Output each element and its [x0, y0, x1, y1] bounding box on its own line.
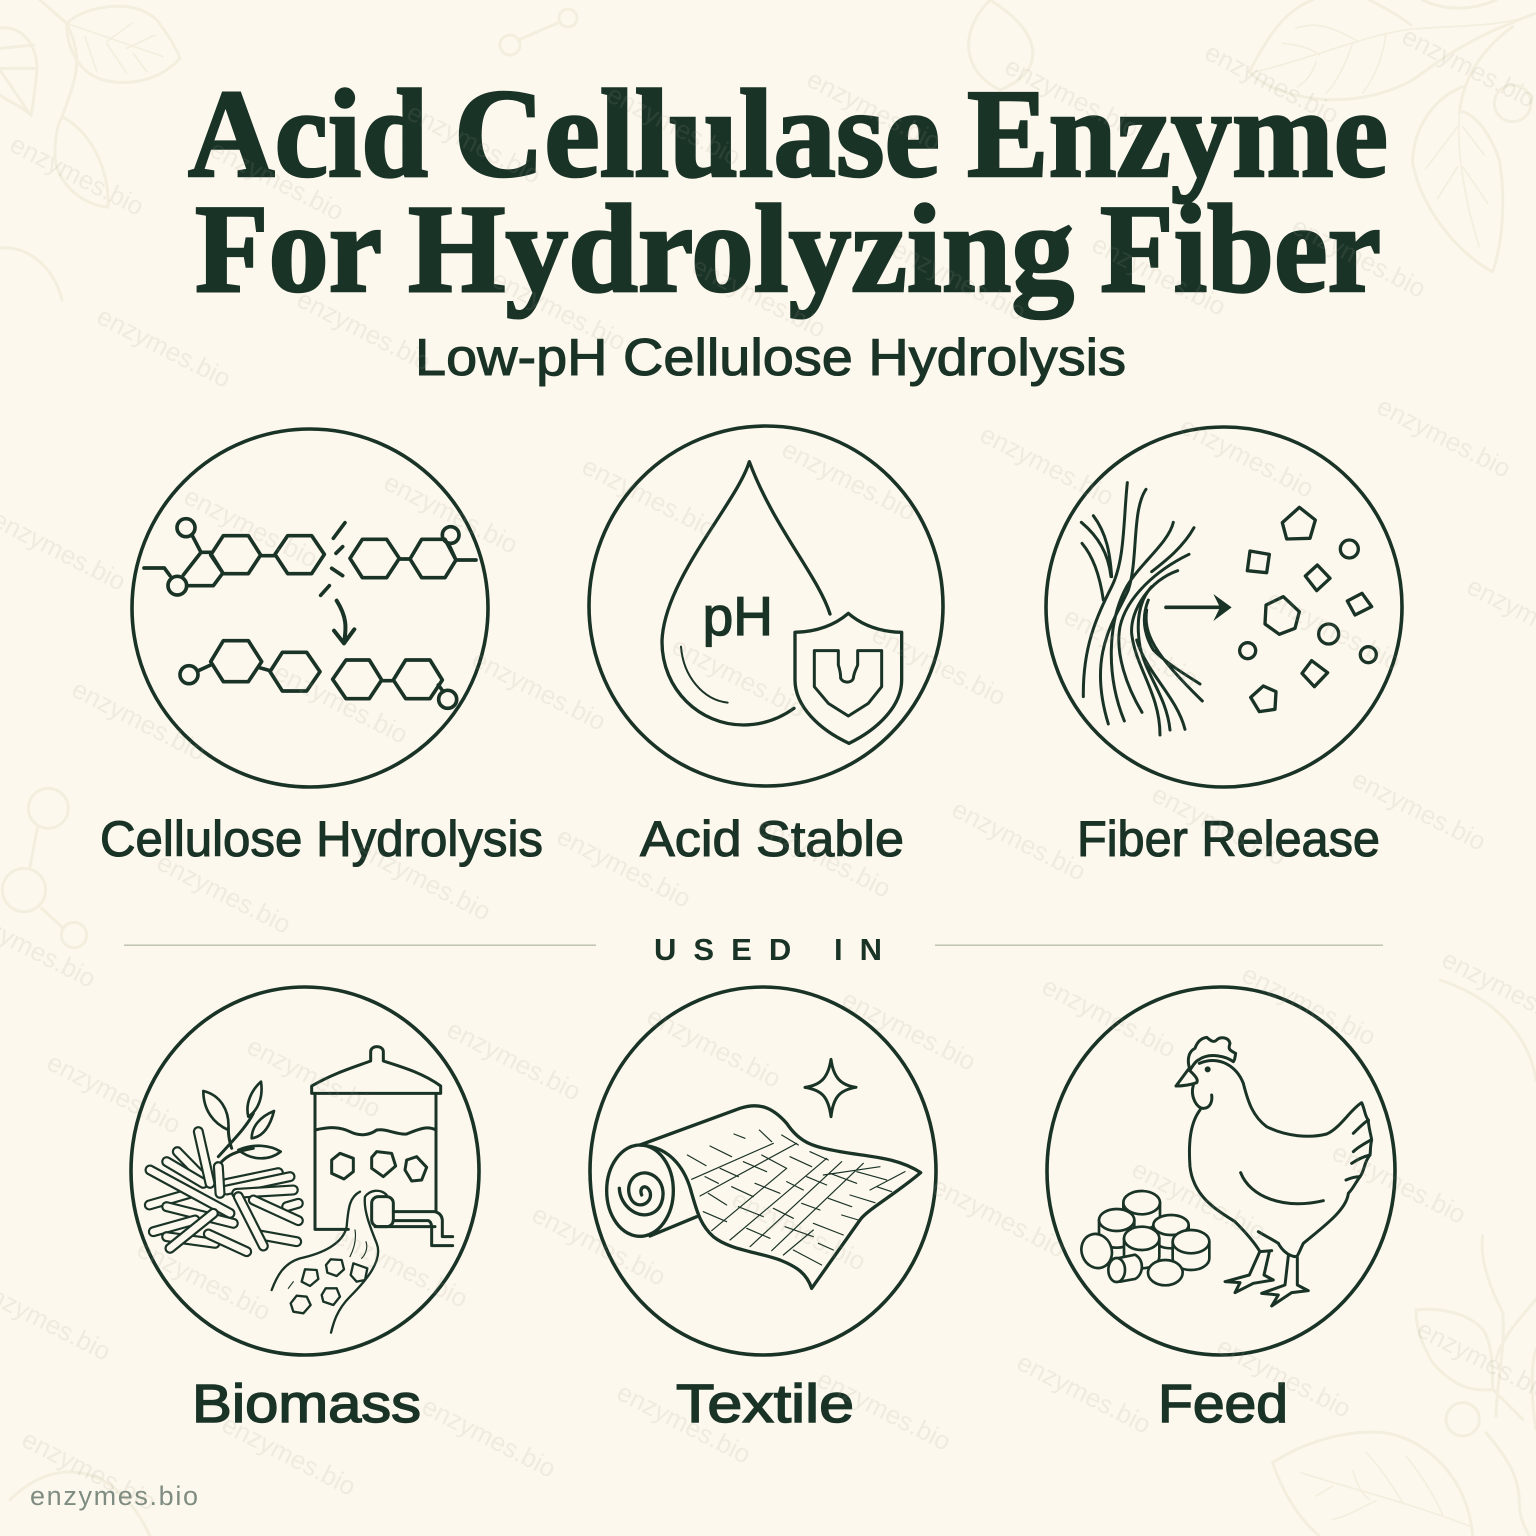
watermark pattern: enzymes.bio [1200, 37, 1344, 130]
icon: acid stable: pH [703, 585, 773, 647]
watermark pattern: enzymes.bio [329, 1221, 473, 1314]
watermark pattern: enzymes.bio [1000, 51, 1144, 144]
watermark pattern: enzymes.bio [927, 1171, 1071, 1264]
watermark pattern: enzymes.bio [67, 674, 211, 767]
watermark pattern: enzymes.bio [1237, 959, 1381, 1052]
watermark pattern: enzymes.bio [379, 467, 523, 560]
watermark pattern: enzymes.bio [1012, 1347, 1156, 1440]
watermark pattern: enzymes.bio [1127, 1154, 1271, 1247]
watermark pattern: enzymes.bio [417, 1391, 561, 1484]
footer: site name: enzymes.bio [30, 1481, 198, 1511]
watermark pattern: enzymes.bio [887, 234, 1031, 327]
watermark pattern: enzymes.bio [1372, 391, 1516, 484]
watermark pattern: enzymes.bio [242, 1031, 386, 1124]
watermark pattern: enzymes.bio [612, 1377, 756, 1470]
watermark pattern: enzymes.bio [442, 1014, 586, 1107]
watermark pattern: enzymes.bio [602, 79, 746, 172]
watermark pattern: enzymes.bio [777, 434, 921, 527]
watermark pattern: enzymes.bio [687, 251, 831, 344]
icon: acid stable [589, 426, 943, 786]
label: biomass: Biomass [192, 1374, 421, 1434]
watermark pattern: enzymes.bio [205, 134, 349, 227]
label: feed: Feed [1158, 1374, 1288, 1434]
watermark pattern: enzymes.bio [667, 631, 811, 724]
title: Hydrolyzing [408, 180, 1074, 319]
title: Acid [188, 65, 428, 204]
watermark pattern: enzymes.bio [217, 1409, 361, 1502]
watermark pattern: enzymes.bio [467, 644, 611, 737]
title: Fiber [1100, 180, 1381, 319]
title: For [195, 180, 382, 319]
icon: cellulose hydrolysis [132, 429, 488, 787]
watermark pattern: enzymes.bio [402, 97, 546, 190]
watermark pattern: enzymes.bio [487, 264, 631, 357]
subtitle: Low-pH Cellulose Hydrolysis [415, 329, 1126, 387]
watermark pattern: enzymes.bio [1212, 1331, 1356, 1424]
watermark pattern: enzymes.bio [975, 419, 1119, 512]
watermark pattern: enzymes.bio [1087, 229, 1231, 322]
icon: biomass [131, 987, 479, 1355]
watermark pattern: enzymes.bio [552, 821, 696, 914]
label: acid stable: Acid Stable [640, 811, 904, 867]
watermark pattern: enzymes.bio [1347, 764, 1491, 857]
watermark pattern: enzymes.bio [1175, 411, 1319, 504]
watermark pattern: enzymes.bio [837, 984, 981, 1077]
watermark pattern: enzymes.bio [527, 1199, 671, 1292]
watermark pattern: enzymes.bio [152, 847, 296, 940]
watermark pattern: enzymes.bio [1287, 211, 1431, 304]
watermark pattern: enzymes.bio [42, 1047, 186, 1140]
watermark pattern: enzymes.bio [1262, 584, 1406, 677]
title [188, 65, 1388, 319]
watermark pattern: enzymes.bio [802, 64, 946, 157]
watermark pattern: enzymes.bio [1327, 1137, 1471, 1230]
watermark pattern: enzymes.bio [269, 657, 413, 750]
watermark pattern: enzymes.bio [867, 619, 1011, 712]
watermark pattern: enzymes.bio [577, 451, 721, 544]
watermark pattern: enzymes.bio [1059, 601, 1203, 694]
watermark pattern: enzymes.bio [132, 1234, 276, 1327]
watermark pattern: enzymes.bio [92, 301, 236, 394]
watermark pattern: enzymes.bio [812, 1364, 956, 1457]
watermark pattern: enzymes.bio [179, 481, 323, 574]
watermark pattern: enzymes.bio [752, 811, 896, 904]
watermark pattern: enzymes.bio [5, 129, 149, 222]
label: fiber release: Fiber Release [1077, 811, 1380, 867]
label: textile: Textile [676, 1374, 854, 1434]
watermark pattern: enzymes.bio [1037, 971, 1181, 1064]
section divider: used in: USED IN [654, 932, 882, 967]
icon: feed [1047, 987, 1395, 1355]
label: cellulose hydrolysis: Cellulose Hydrolysis [100, 811, 543, 867]
title: Cellulase [454, 65, 940, 204]
watermark pattern: enzymes.bio [947, 794, 1091, 887]
icon: fiber release [1046, 427, 1402, 787]
watermark pattern: enzymes.bio [352, 834, 496, 927]
watermark pattern: enzymes.bio [1147, 779, 1291, 872]
watermark pattern: enzymes.bio [17, 1424, 161, 1517]
icon: textile [590, 987, 936, 1355]
watermark pattern: enzymes.bio [292, 284, 436, 377]
watermark pattern: enzymes.bio [727, 1184, 871, 1277]
title: Enzyme [967, 65, 1388, 204]
watermark pattern: enzymes.bio [642, 1001, 786, 1094]
